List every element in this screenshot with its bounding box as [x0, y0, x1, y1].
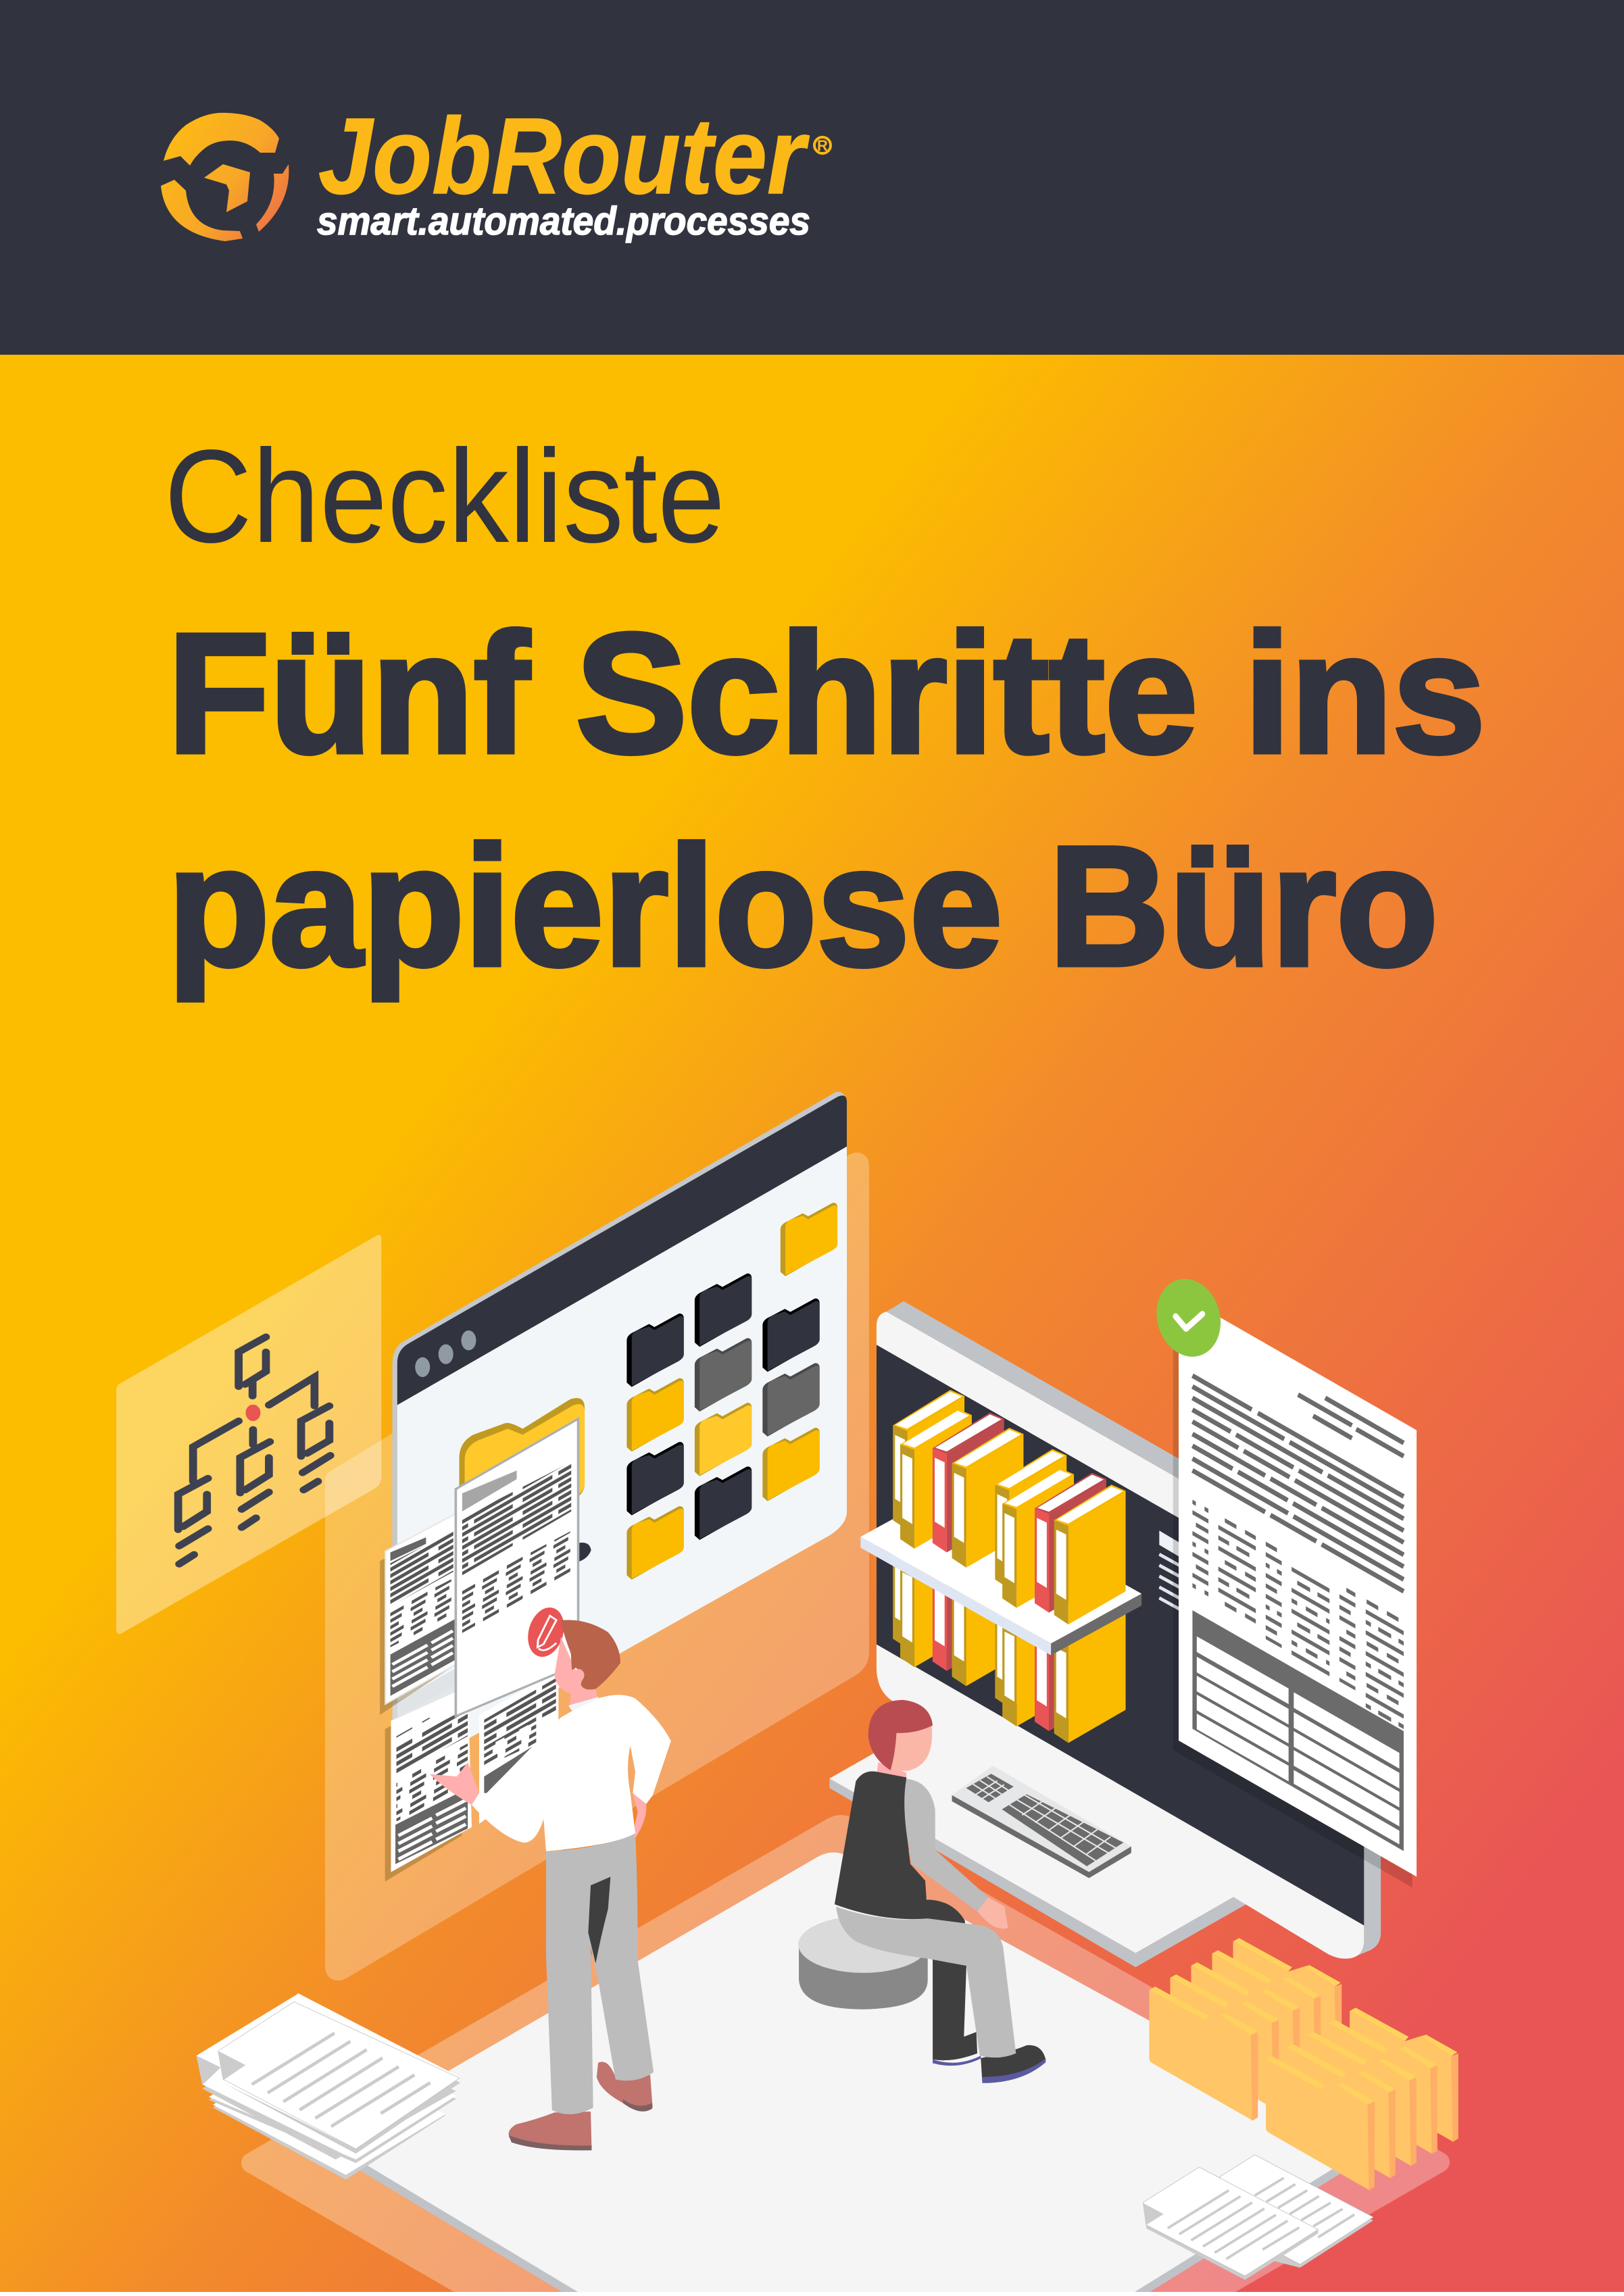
bottom margin strip	[0, 2292, 1624, 2296]
glass sheet between documents	[393, 1668, 457, 1721]
icon: JobRouter logo mark	[161, 113, 289, 241]
trouser shadow	[588, 1877, 610, 1964]
shoes	[933, 2055, 981, 2066]
document: lower left	[391, 1678, 472, 1872]
window body	[397, 1147, 847, 1778]
binders upper row	[893, 1390, 1126, 1624]
icon: signature badge	[523, 1605, 569, 1659]
translucent glass panel	[335, 1162, 860, 1971]
screen	[877, 1345, 1364, 1926]
neck	[877, 1762, 906, 1781]
document: lower right	[479, 1670, 558, 1824]
paper fold	[197, 2055, 221, 2085]
monitor rim	[887, 1301, 1381, 1959]
neck and face	[554, 1637, 598, 1705]
keyboard	[952, 1766, 1131, 1878]
document: back left	[385, 1514, 456, 1704]
translucent card	[116, 1235, 381, 1634]
standing person	[430, 1620, 671, 2151]
hip hand	[633, 1793, 646, 1838]
yellow folders	[1143, 1938, 1458, 2280]
desk underside	[829, 1778, 1246, 1967]
hand	[977, 1897, 1008, 1929]
top sheet	[218, 2002, 460, 2149]
panel: workflow diagram	[116, 1235, 381, 1634]
sheet lines	[252, 2033, 430, 2126]
registered mark	[814, 137, 831, 154]
paper sheets right	[1143, 2155, 1373, 2280]
panel: browser window	[393, 1092, 847, 1778]
shirt	[472, 1695, 671, 1851]
small stripes on screen	[1159, 1530, 1182, 1558]
folder group front	[1266, 2007, 1458, 2191]
floor plate translucent	[251, 1825, 1440, 2296]
documents on window	[380, 1419, 579, 1716]
stool	[798, 1916, 928, 2010]
document shadow	[1173, 1293, 1412, 1888]
seated person	[835, 1700, 1045, 2083]
panel: monitor with shelf	[829, 1268, 1417, 1967]
tagline: smart.automated.processes	[317, 199, 810, 243]
document shadow	[385, 1687, 462, 1882]
window rim	[393, 1092, 847, 1778]
flow chart icon	[178, 1337, 330, 1564]
header band	[0, 0, 1624, 355]
red node	[245, 1405, 260, 1421]
title: papierlose Büro: papierlose Büro	[168, 812, 1438, 1001]
ear	[573, 1669, 584, 1681]
paper stack left	[197, 1993, 460, 2180]
window title bar	[397, 1095, 847, 1405]
lower documents on glass panel	[385, 1668, 558, 1882]
document: front	[456, 1419, 579, 1716]
shoes	[597, 2062, 653, 2110]
folder group back	[1150, 1938, 1342, 2121]
document shadow	[380, 1524, 449, 1715]
shelf	[860, 1487, 1141, 1655]
large open folder	[460, 1398, 585, 1550]
title: Fünf Schritte ins: Fünf Schritte ins	[168, 599, 1485, 789]
dark item behind document	[572, 1543, 591, 1563]
window buttons	[415, 1330, 476, 1377]
pointing hand	[430, 1762, 479, 1805]
binders lower row	[893, 1508, 1126, 1743]
panel: people	[430, 1620, 1045, 2151]
registered mark: R	[817, 137, 828, 154]
front leg	[836, 1907, 1016, 2057]
sleeve	[904, 1779, 988, 1912]
face	[891, 1726, 932, 1771]
document table	[1192, 1610, 1404, 1851]
trousers	[546, 1833, 654, 2114]
hair	[868, 1700, 933, 1770]
vest	[835, 1772, 928, 1919]
monitor bezel and desk	[829, 1312, 1364, 1959]
logo	[161, 95, 831, 243]
title: Checkliste: Checkliste	[164, 422, 725, 570]
wordmark: JobRouter	[318, 95, 810, 216]
hair	[561, 1620, 620, 1689]
rear leg	[925, 1899, 977, 2060]
icon: green check badge	[1145, 1268, 1232, 1368]
folder grid	[626, 1203, 837, 1580]
floor	[327, 1853, 1374, 2296]
floor shadow edge	[327, 1862, 1374, 2296]
document: approved	[1179, 1294, 1417, 1876]
collar	[568, 1697, 601, 1713]
